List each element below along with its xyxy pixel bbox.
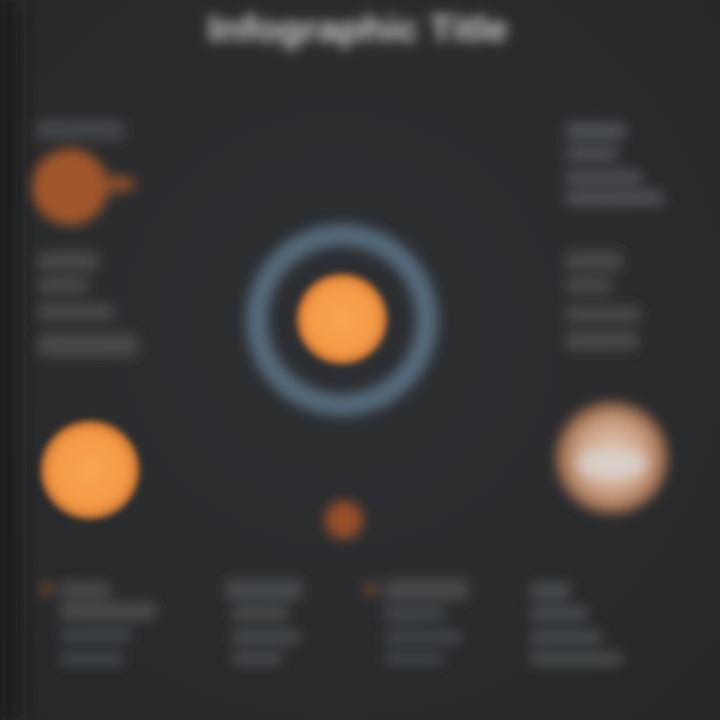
text block: bottom column 4 [530, 582, 622, 666]
panel: top left item [32, 120, 136, 225]
text block: bottom column 3 [364, 580, 468, 665]
icon: central orange circle [297, 274, 387, 364]
text block: top right [566, 122, 664, 206]
text block: bottom column 2 [226, 580, 302, 665]
heading: top left label [36, 120, 124, 140]
icon: small bottom orange dot [325, 501, 363, 539]
icon: top left orange circle [32, 149, 136, 225]
text block: left middle [38, 252, 138, 356]
icon: central ring [257, 235, 427, 405]
text block: bottom column 1 [40, 582, 156, 666]
icon: lower left orange circle [41, 421, 139, 519]
text block: right middle [566, 252, 640, 350]
icon: lower right tan circle [556, 402, 668, 514]
title: Infographic Title [208, 8, 508, 49]
background edge shading [0, 0, 18, 720]
